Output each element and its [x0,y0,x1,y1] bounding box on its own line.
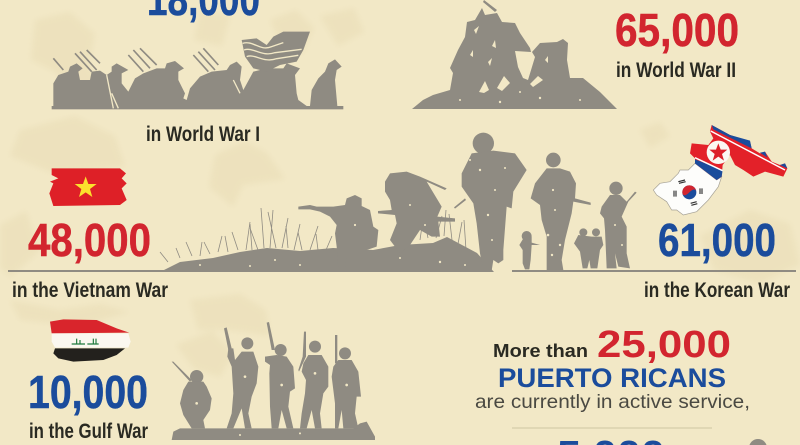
South Korea [653,163,722,215]
number 25,000: 25,000 [597,324,731,366]
soldier crouching with rifle [378,172,455,253]
soldier standing with rifle [600,182,637,268]
two small soldiers [574,228,603,268]
stat: 65,000 in World War II [412,0,739,109]
number 61,000: 61,000 [658,214,776,266]
small soldier [519,231,540,269]
cropped figures at the bottom edge [560,439,766,445]
icon: American flag [242,32,310,72]
soldier standing, back view [531,153,591,270]
label in World War II: in World War II [616,59,736,82]
stat: 18,000 in World War I [52,0,343,146]
stat: Puerto Ricans in active service [475,324,767,445]
divider [512,428,712,429]
soldier with raised rifle 2 [265,322,295,428]
text More than: More than [493,340,588,361]
number 10,000: 10,000 [28,366,148,418]
text are currently in active service: are currently in active service, [475,391,750,413]
text PUERTO RICANS: PUERTO RICANS [498,363,726,393]
illustration: WWI soldiers advancing with flag [52,32,343,109]
soldier running, large [454,133,527,271]
stat: 48,000 in the Vietnam War [12,168,168,302]
number 48,000: 48,000 [28,214,151,266]
soldier with raised rifle 1 [224,327,258,428]
stat: 61,000 in the Korean War [644,125,790,302]
number 65,000: 65,000 [615,4,739,56]
soldier with raised rifle 3 [298,332,328,428]
grass [160,237,494,272]
illustration: flag raising on a hill [412,0,617,109]
stat: 10,000 in the Gulf War [28,319,148,443]
illustration: soldiers on the battlefield [8,133,796,272]
North Korea [690,125,787,180]
label in the Vietnam War: in the Vietnam War [12,279,168,302]
icon: Korean peninsula flags map [653,125,787,215]
icon: figure head, cropped [749,439,767,445]
label in the Gulf War: in the Gulf War [29,420,148,443]
label in World War I: in World War I [146,123,260,146]
soldier aiming rifle [298,195,378,270]
soldier with raised rifle 4 [332,335,361,428]
icon: Iraq flag [50,319,131,362]
kneeling soldier [172,362,212,428]
illustration: soldiers raising rifles [172,322,375,440]
icon: Vietnam flag [49,168,127,206]
